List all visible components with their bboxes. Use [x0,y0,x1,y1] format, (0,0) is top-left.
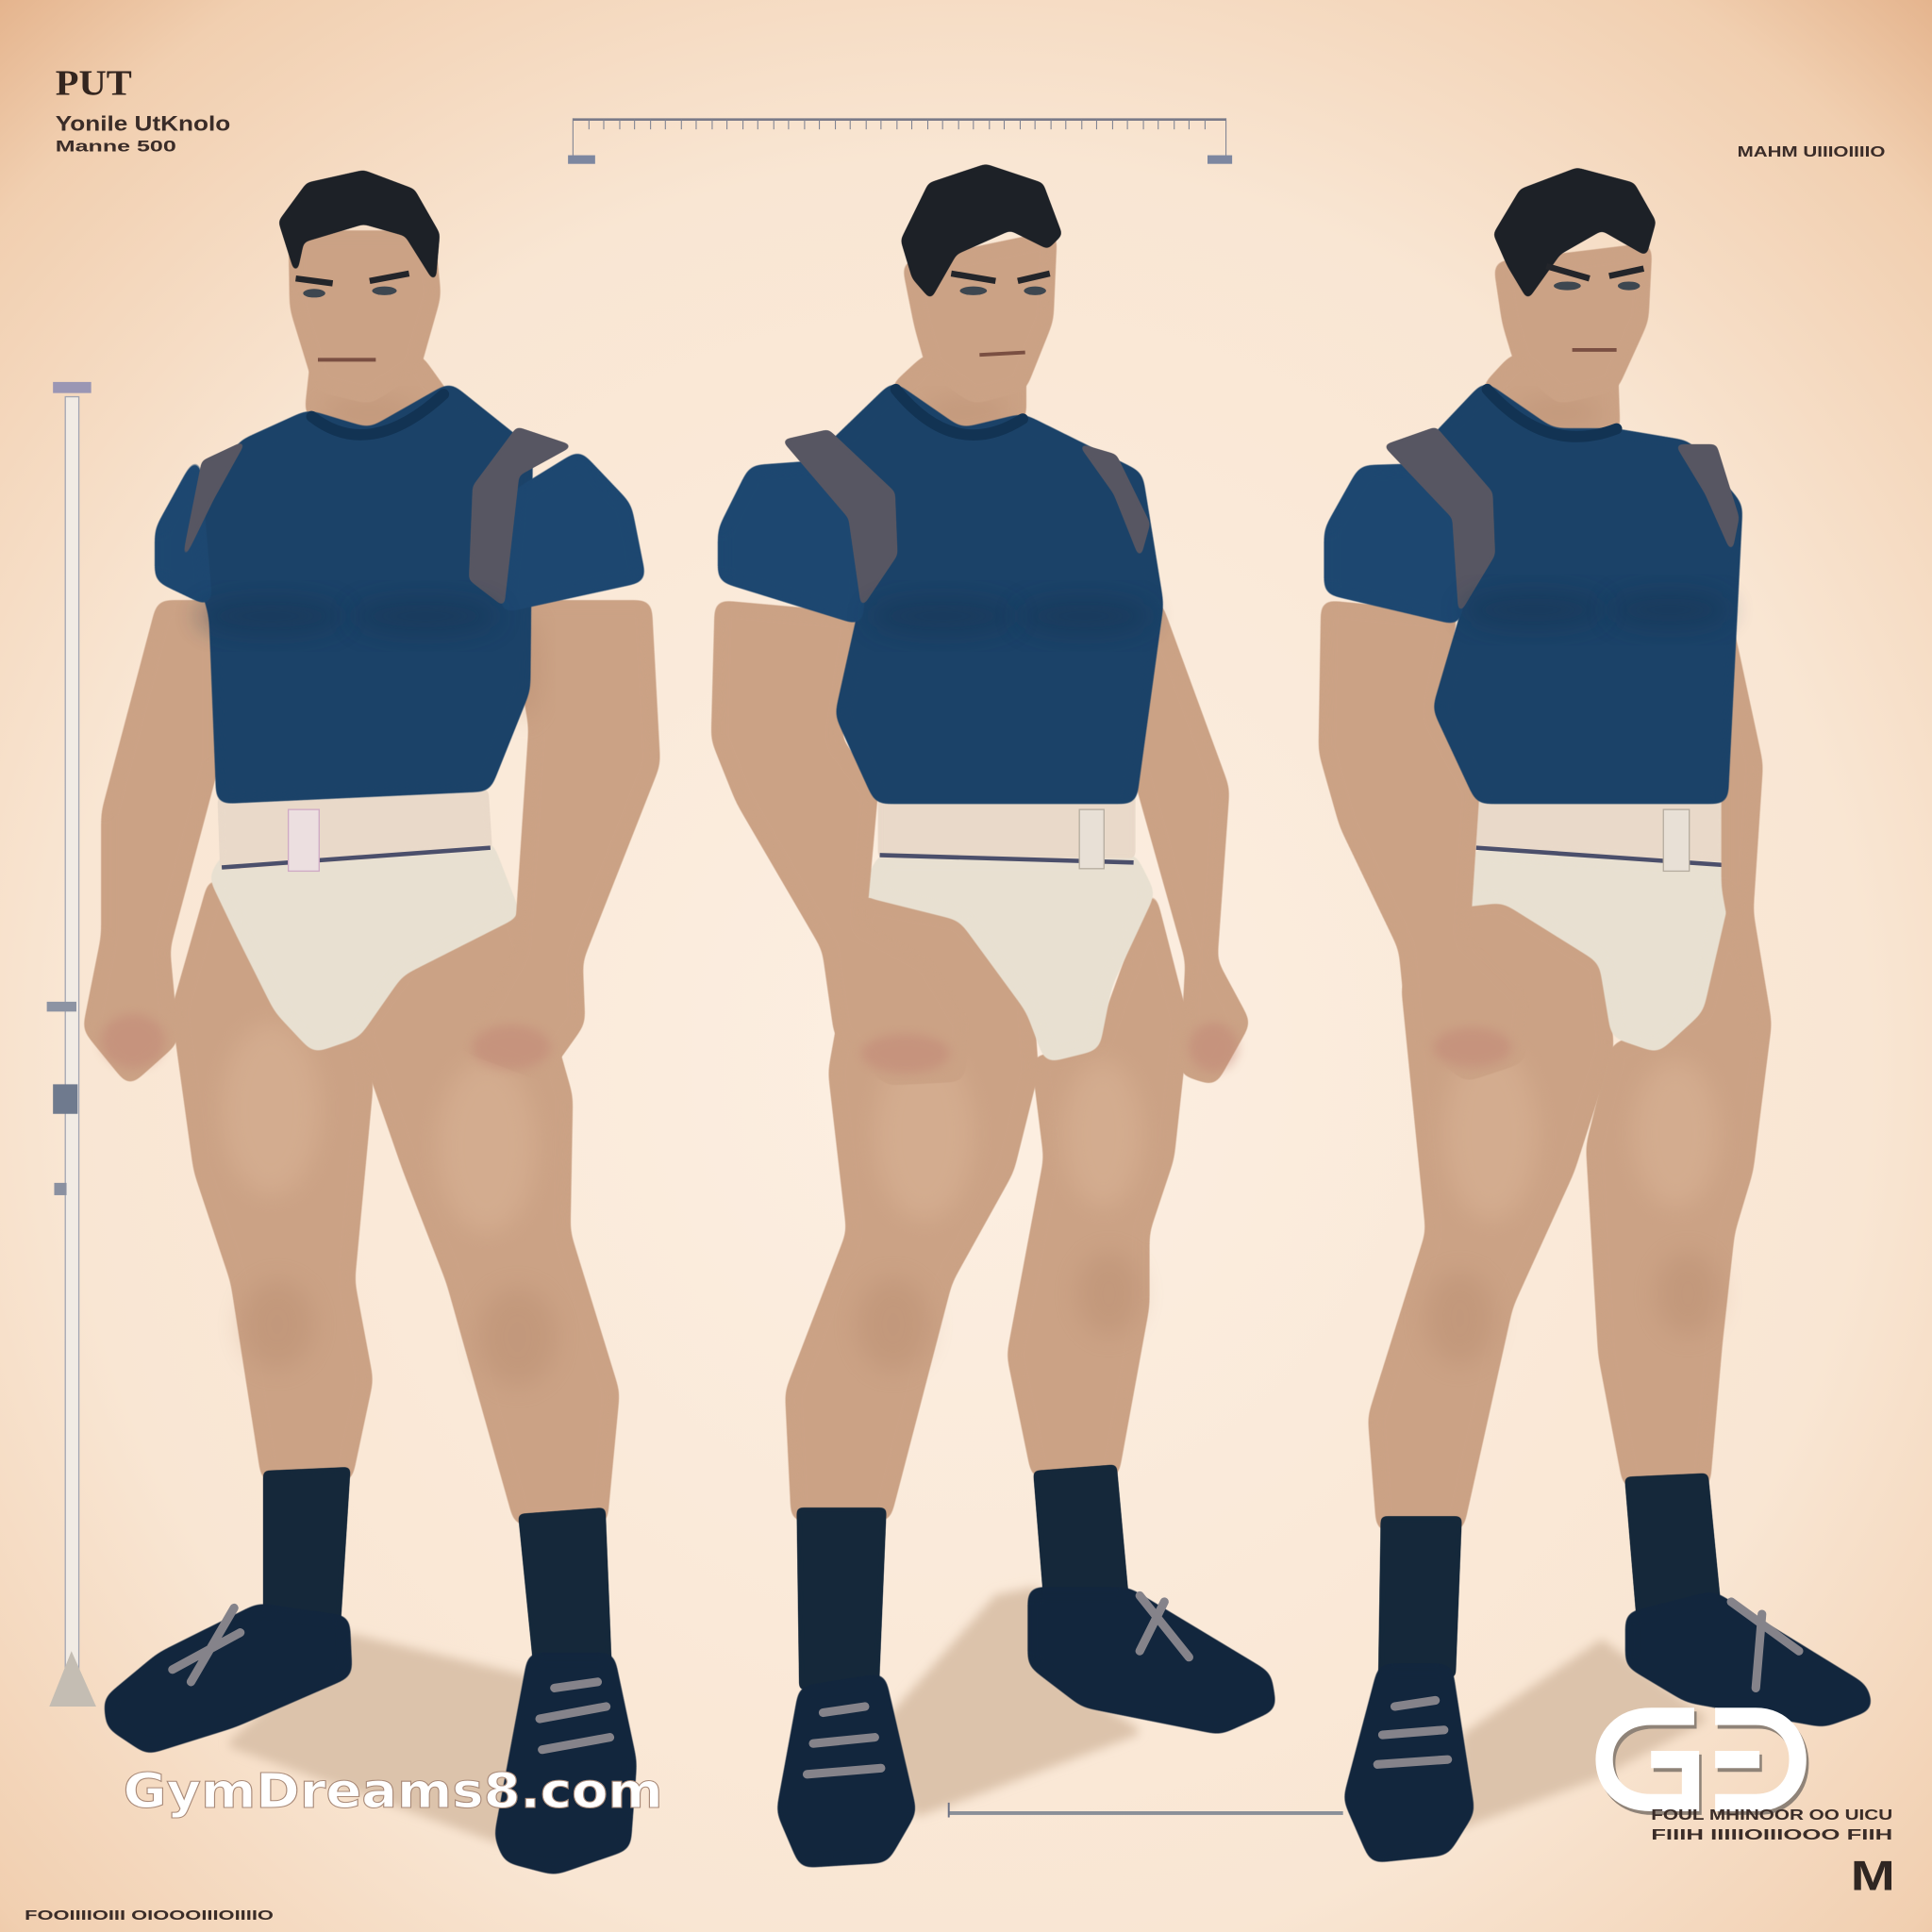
shoes [1348,1595,1868,1858]
figure 2 [715,166,1272,1863]
figure 2 shadow [887,1592,1134,1811]
legs [1372,899,1768,1528]
shirt [721,385,1160,801]
arms [86,604,657,1082]
socks [798,1466,1127,1688]
neck and head [281,173,450,450]
underwear [862,794,1152,1059]
bottom right caption [1651,1807,1892,1843]
figure 1 shadow [234,1639,532,1839]
left vertical ruler [47,382,96,1707]
shoes [108,1607,632,1871]
top right caption: MAHM UIIIOIIIIO [1738,144,1885,160]
figure 3 shadow [1460,1645,1700,1824]
neck and head [1485,170,1654,443]
bottom ruler [949,1803,1343,1818]
shoes [781,1592,1272,1863]
figure 1 [86,173,657,1871]
legs [789,893,1185,1518]
logo: GD monogram [1605,1716,1800,1807]
shirt [158,386,643,801]
top ruler [568,118,1232,164]
heading block [56,64,230,156]
arms [1322,604,1768,1078]
figure 3 [1322,170,1868,1858]
heading block: Yonile UtKnolo [56,111,230,135]
heading block: PUT [56,64,132,104]
bottom left caption: FOOIIIIOIII OIOOOIIIOIIIIO [25,1908,274,1924]
legs [175,881,616,1522]
neck and head [893,166,1059,438]
heading block: Manne 500 [56,138,176,156]
arms [715,604,1247,1082]
underwear [1452,791,1727,1050]
socks [265,1469,610,1675]
corner letter M: M [1851,1854,1895,1900]
socks [1380,1474,1719,1675]
website watermark: GymDreams8.com [124,1764,663,1820]
underwear [212,791,518,1050]
bottom right caption: FIIIH IIIIIOIIIOOO FIIH [1651,1827,1892,1843]
shirt [1327,385,1740,801]
bottom right caption: FOUL MHINOOR OO UICU [1651,1807,1892,1824]
